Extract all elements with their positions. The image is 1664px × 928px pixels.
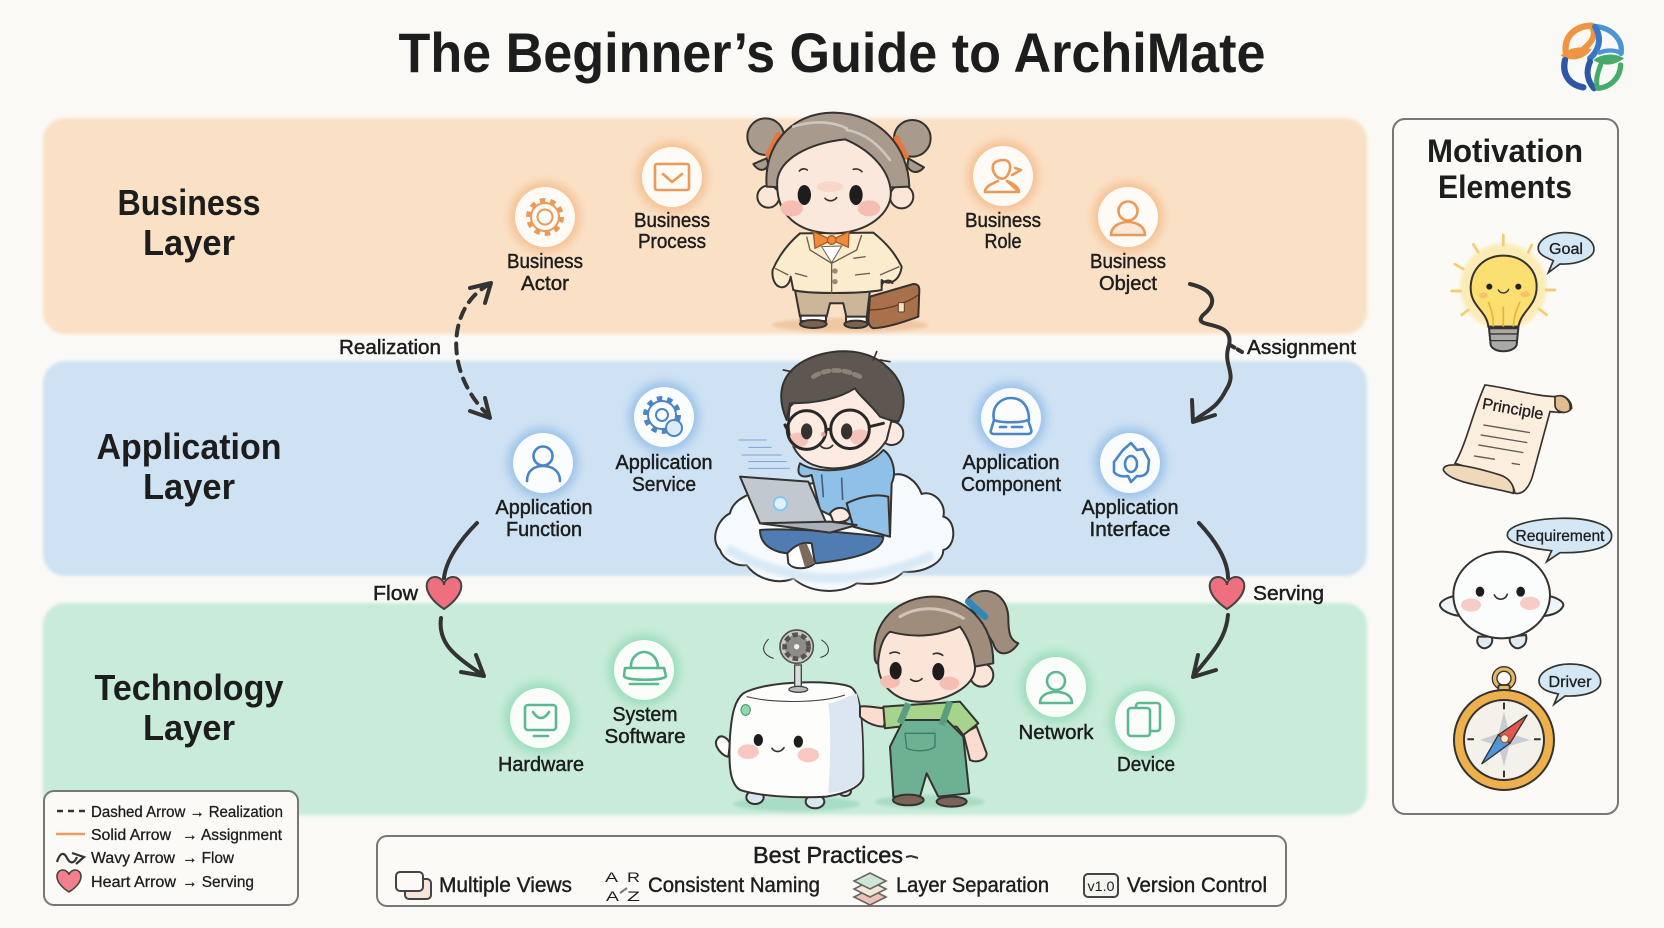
node: network: Network	[1018, 722, 1095, 744]
legend row: heart: Heart Arrow	[91, 874, 176, 891]
arrow: serving	[1193, 523, 1244, 677]
panel: business layer	[43, 118, 1367, 334]
node: device	[1110, 686, 1180, 776]
arrow: flow	[427, 523, 484, 676]
label: realization: Realization	[339, 337, 441, 359]
legend row: solid: Solid Arrow	[91, 827, 171, 844]
character: developer on cloud	[715, 351, 953, 591]
icon: driver compass	[1454, 664, 1601, 790]
heading: business layer: Layer	[143, 222, 235, 263]
panel: technology layer	[43, 603, 1367, 815]
practice: version control: Version Control	[1127, 874, 1267, 897]
node: business object	[1090, 182, 1166, 295]
icon: gear with dot	[646, 399, 682, 436]
practice: consistent naming: A	[605, 869, 619, 885]
practice: version control: v1.0	[1088, 878, 1115, 894]
legend row: solid: → Assignment	[182, 827, 283, 844]
heading: technology layer: Layer	[143, 707, 235, 748]
label: principle: Principle	[1481, 396, 1545, 423]
icon: gear	[529, 201, 561, 233]
heading: business layer	[118, 182, 260, 263]
panel: best practices	[377, 836, 1286, 906]
node: application component: Application	[962, 452, 1060, 474]
node: business object: Object	[1099, 273, 1157, 295]
node: application interface	[1082, 428, 1178, 541]
icon: light bulb goal	[1452, 233, 1594, 351]
icon: heart flow	[427, 577, 461, 609]
legend row: wavy: → Flow	[182, 850, 234, 867]
icon: principle scroll	[1443, 385, 1572, 494]
logo	[1561, 26, 1624, 88]
heading: technology layer: Technology	[94, 667, 284, 708]
node: network	[1018, 652, 1095, 744]
legend row: solid	[56, 827, 283, 844]
icon: person with arrow	[985, 160, 1021, 192]
node: business role: Role	[984, 231, 1022, 253]
icon: monitor	[525, 705, 556, 736]
label: driver: Driver	[1548, 674, 1592, 691]
node: business object: Business	[1090, 251, 1166, 273]
heading: best practices: Best Practices	[753, 842, 903, 868]
heading: motivation elements	[1427, 133, 1583, 205]
icon: requirement blob	[1440, 518, 1612, 648]
heading: business layer: Business	[118, 182, 260, 223]
node: business process: Process	[638, 231, 706, 253]
icon: envelope check	[655, 164, 689, 190]
node: device: Device	[1117, 754, 1175, 776]
practice: consistent naming	[605, 869, 820, 904]
panel: application layer	[43, 361, 1367, 576]
label: flow: Flow	[373, 583, 419, 605]
practice: layer separation: Layer Separation	[896, 874, 1049, 897]
legend row: wavy	[57, 850, 234, 867]
icon: cloud server	[991, 398, 1031, 434]
node: hardware: Hardware	[498, 754, 584, 776]
label: goal: Goal	[1549, 241, 1583, 258]
label: serving: Serving	[1253, 583, 1324, 605]
icon: person network	[1040, 672, 1072, 703]
legend row: heart	[57, 870, 254, 892]
title: The Beginner’s Guide to ArchiMate	[398, 21, 1266, 84]
legend	[44, 791, 298, 905]
node: business role: Business	[965, 210, 1041, 232]
icon: user	[527, 446, 560, 481]
node: business actor	[507, 182, 583, 295]
icon: shield interface	[1114, 443, 1149, 482]
character: robot server	[716, 591, 1018, 811]
heading: technology layer	[94, 667, 284, 748]
heading: application layer: Application	[96, 426, 282, 467]
node: hardware	[498, 683, 584, 776]
node: application service: Service	[632, 474, 696, 496]
node: system software: Software	[604, 726, 686, 748]
heading: application layer	[96, 426, 282, 507]
icon: heart serving	[1210, 577, 1244, 609]
node: application interface: Application	[1082, 497, 1178, 519]
node: application interface: Interface	[1090, 519, 1170, 541]
node: business process	[634, 142, 710, 253]
legend row: dashed: Dashed Arrow → Realization	[91, 804, 283, 821]
node: business process: Business	[634, 210, 710, 232]
panel: motivation elements	[1393, 119, 1618, 814]
node: application service	[616, 382, 712, 496]
node: application function	[496, 428, 592, 541]
heading: application layer: Layer	[143, 466, 235, 507]
arrow: assignment wavy	[1190, 284, 1242, 422]
node: application service: Application	[616, 452, 712, 474]
legend row: wavy: Wavy Arrow	[91, 850, 175, 867]
practice: consistent naming: Consistent Naming	[648, 874, 820, 897]
node: application function: Application	[496, 497, 592, 519]
practice: multiple views	[396, 872, 572, 899]
icon: devices	[1128, 703, 1160, 736]
icon: person	[1111, 202, 1145, 235]
icon: cloud on tray	[624, 652, 666, 684]
node: business actor: Actor	[521, 273, 569, 295]
node: application component	[961, 383, 1061, 496]
label: requirement: Requirement	[1516, 528, 1605, 545]
legend row: heart: → Serving	[182, 874, 254, 891]
character: business person	[747, 113, 931, 332]
node: business actor: Business	[507, 251, 583, 273]
node: system software	[604, 635, 686, 748]
practice: consistent naming: R	[627, 869, 640, 885]
node: system software: System	[612, 704, 678, 726]
arrow: realization dashed	[456, 283, 491, 418]
node: business role	[965, 141, 1041, 253]
heading: motivation elements: Motivation	[1427, 133, 1583, 169]
label: assignment: Assignment	[1247, 337, 1356, 359]
node: application function: Function	[506, 519, 582, 541]
node: application component: Component	[961, 474, 1061, 496]
practice: consistent naming: Z	[627, 888, 641, 904]
practice: multiple views: Multiple Views	[439, 874, 572, 897]
practice: consistent naming: A	[606, 888, 620, 904]
practice: layer separation	[854, 873, 1049, 905]
heading: motivation elements: Elements	[1438, 169, 1572, 205]
